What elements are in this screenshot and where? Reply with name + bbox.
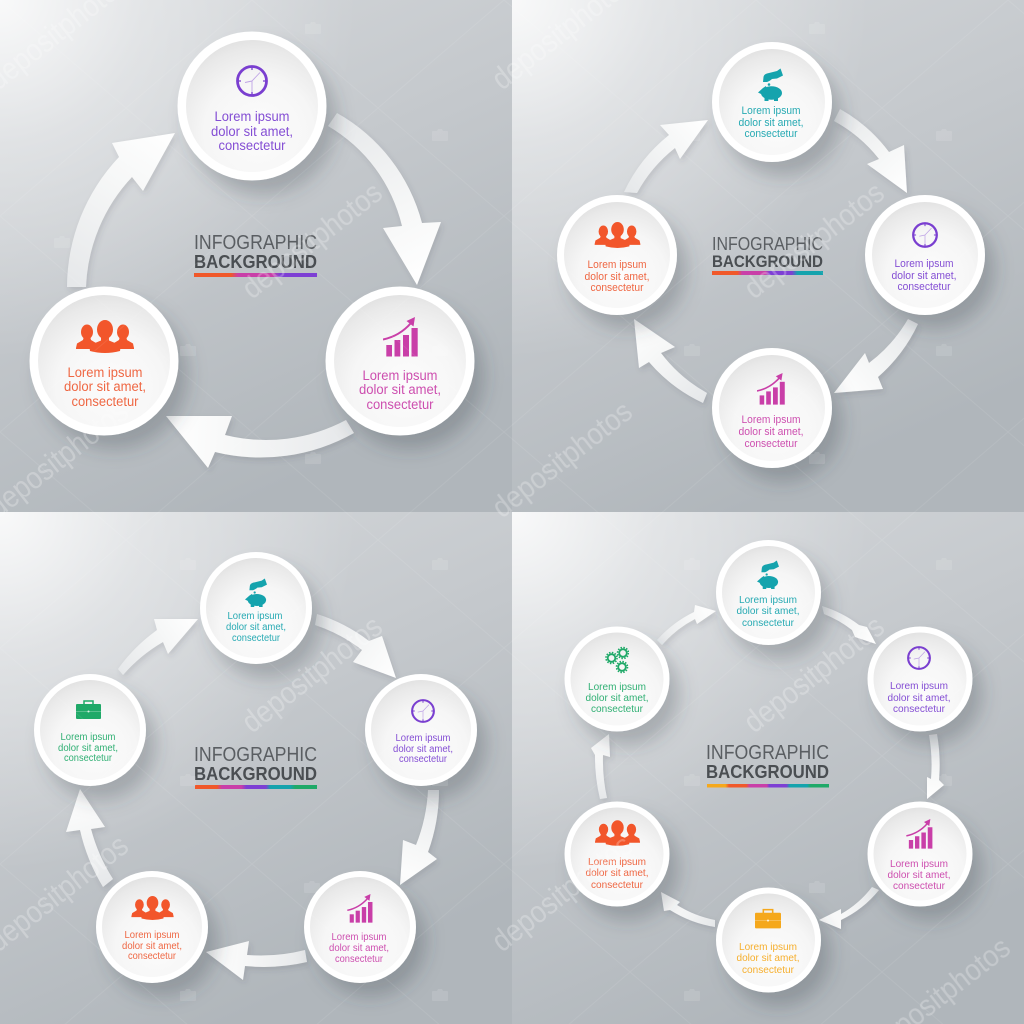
node text: consectetur (744, 128, 798, 140)
node text: dolor sit amet, (211, 124, 293, 139)
node text: consectetur (742, 965, 795, 976)
node: clock (178, 32, 326, 180)
node text (393, 733, 453, 765)
icon: briefcase (755, 910, 781, 928)
node: growth chart (712, 348, 832, 468)
heading: BACKGROUND (194, 251, 317, 272)
node text: Lorem ipsum (588, 259, 647, 271)
panel background (0, 0, 512, 512)
node text (892, 258, 956, 293)
panel: four-step cycle (512, 0, 1024, 512)
node: briefcase (34, 674, 146, 786)
arrow: lower right to bottom (819, 887, 879, 929)
node text (586, 682, 648, 715)
heading: BACKGROUND (712, 252, 823, 271)
node text: Lorem ipsum (742, 105, 801, 117)
icon: clock (412, 700, 434, 722)
node text (888, 859, 950, 892)
arrow: lower left to left (66, 789, 113, 887)
node text (64, 365, 146, 409)
node text: Lorem ipsum (894, 258, 954, 270)
stock watermark overlay: depositphotos (737, 175, 891, 306)
node: people (30, 286, 178, 436)
node text (586, 857, 648, 891)
node: people (564, 802, 670, 906)
node: growth chart (304, 871, 416, 983)
node text: consectetur (742, 618, 795, 629)
panel background (512, 512, 1024, 1024)
panel background (512, 0, 1024, 512)
node text: Lorem ipsum (124, 930, 180, 941)
node text: consectetur (399, 754, 448, 765)
node text: dolor sit amet, (58, 743, 118, 754)
node text: Lorem ipsum (739, 942, 797, 953)
icon: bar chart (757, 373, 785, 405)
arrow: lower left to upper left (591, 734, 610, 799)
arrow: right to bottom (834, 319, 918, 393)
icon: people (76, 320, 134, 353)
node text: Lorem ipsum (68, 365, 142, 380)
node text: dolor sit amet, (329, 943, 389, 954)
icon: briefcase (76, 701, 101, 719)
node: piggy bank (200, 552, 312, 664)
arrow: top to upper right (822, 606, 876, 644)
node text: Lorem ipsum (214, 109, 290, 124)
stock watermark overlay: depositphotos (235, 175, 389, 306)
node text: dolor sit amet, (738, 117, 804, 129)
node text (329, 932, 389, 965)
node text: consectetur (232, 633, 281, 644)
node text: Lorem ipsum (588, 857, 646, 868)
stock watermark overlay: depositphotos (485, 394, 639, 525)
node text: Lorem ipsum (332, 932, 386, 943)
icon: piggy bank (758, 68, 783, 101)
heading: BACKGROUND (706, 761, 829, 782)
icon: clock (238, 66, 266, 96)
node text: dolor sit amet, (122, 941, 182, 952)
arrow: upper left to top (657, 605, 716, 645)
icon: clock (913, 223, 937, 247)
heading (194, 744, 317, 789)
panel: five-step cycle (0, 512, 512, 1024)
node text: consectetur (591, 704, 644, 715)
arrow: upper right to lower right (927, 734, 944, 799)
heading (194, 232, 317, 277)
arrow: bottom to left (634, 319, 707, 403)
node: clock (365, 674, 477, 786)
node: clock (868, 626, 972, 732)
node text: dolor sit amet, (888, 870, 950, 881)
node text: Lorem ipsum (396, 733, 450, 744)
heading: BACKGROUND (194, 763, 317, 784)
icon: piggy bank (245, 578, 267, 607)
node text: dolor sit amet, (584, 271, 650, 283)
node text (736, 595, 800, 629)
node text (226, 611, 286, 644)
node text: consectetur (898, 281, 951, 293)
icon: people (131, 896, 174, 920)
node text: consectetur (335, 954, 384, 965)
arrow: right to left (166, 416, 354, 468)
node text: consectetur (744, 438, 798, 450)
stock watermark overlay: depositphotos (485, 828, 639, 959)
node: people (557, 195, 677, 315)
icon: gears (606, 648, 628, 672)
icon: people (595, 222, 640, 248)
node text (584, 259, 650, 294)
icon: clock (908, 647, 930, 669)
node text: consectetur (893, 704, 946, 715)
node text (122, 930, 182, 962)
node text (888, 681, 950, 715)
node text (738, 414, 804, 450)
node text: consectetur (366, 397, 434, 412)
node: piggy bank (712, 42, 832, 162)
node text (211, 109, 293, 153)
node text: Lorem ipsum (890, 681, 948, 692)
icon: bar chart (347, 894, 372, 923)
icon: piggy bank (757, 560, 779, 589)
node text (359, 368, 441, 412)
arrow: left to top (67, 133, 175, 287)
arrow: left to top (118, 619, 198, 675)
arrow: bottom to lower left (661, 892, 715, 927)
node text: dolor sit amet, (226, 622, 286, 633)
panel: three-step cycle (0, 0, 512, 512)
node text: consectetur (72, 394, 139, 409)
arrow: right to lower right (400, 790, 439, 885)
node text (58, 732, 118, 764)
node text: dolor sit amet, (586, 868, 648, 879)
panel background (0, 512, 512, 1024)
node text: dolor sit amet, (359, 382, 441, 397)
node text: consectetur (590, 282, 644, 294)
node text: dolor sit amet, (892, 270, 956, 282)
node text: dolor sit amet, (64, 379, 146, 394)
node text: consectetur (128, 951, 177, 962)
node text (738, 105, 804, 140)
node text: consectetur (218, 138, 286, 153)
arrow: left to top (624, 120, 708, 193)
node text: consectetur (64, 753, 113, 764)
node text: Lorem ipsum (588, 682, 646, 693)
heading: INFOGRAPHIC (706, 742, 829, 764)
icon: bar chart (906, 819, 932, 849)
node: gears (564, 626, 670, 732)
arrow: lower right to lower left (206, 941, 307, 980)
icon: people (595, 820, 640, 846)
node text: dolor sit amet, (393, 744, 453, 755)
node text: dolor sit amet, (736, 606, 800, 617)
node text: Lorem ipsum (60, 732, 116, 743)
node: people (96, 871, 208, 983)
heading (712, 234, 823, 275)
node text: Lorem ipsum (890, 859, 948, 870)
node text: dolor sit amet, (736, 953, 800, 964)
node: briefcase (716, 888, 821, 992)
stock watermark overlay: depositphotos (235, 609, 389, 740)
stock watermark overlay: depositphotos (737, 609, 891, 740)
heading (706, 742, 829, 788)
node: growth chart (868, 802, 972, 906)
icon: bar chart (383, 317, 418, 356)
node text (736, 942, 800, 976)
node text: Lorem ipsum (742, 414, 801, 426)
heading: INFOGRAPHIC (194, 744, 317, 766)
node text: consectetur (591, 880, 644, 891)
node text: consectetur (893, 881, 946, 892)
arrow: top to right (834, 109, 907, 193)
node: growth chart (326, 286, 474, 436)
node text: dolor sit amet, (738, 426, 804, 438)
arrow: top to right (328, 113, 441, 285)
node text: Lorem ipsum (228, 611, 282, 622)
node text: Lorem ipsum (362, 368, 438, 383)
arrow: top to right (315, 614, 396, 678)
node text: dolor sit amet, (888, 693, 950, 704)
panel: six-step cycle (512, 512, 1024, 1024)
heading: INFOGRAPHIC (194, 232, 317, 254)
node text: dolor sit amet, (586, 693, 648, 704)
heading: INFOGRAPHIC (712, 234, 823, 254)
node: clock (865, 195, 985, 315)
node: piggy bank (716, 540, 821, 645)
node text: Lorem ipsum (739, 595, 797, 606)
